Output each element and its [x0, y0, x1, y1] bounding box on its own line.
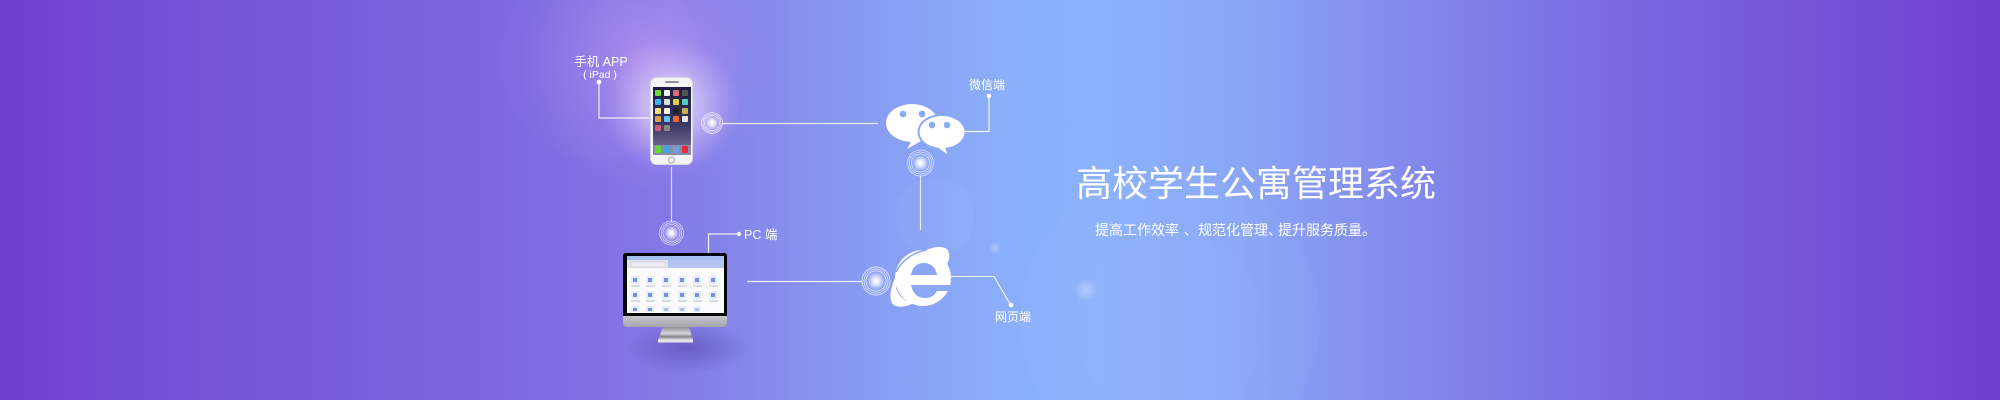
decorative bokeh circles	[500, 0, 1320, 400]
connector: monitor to IE	[747, 280, 862, 282]
label: web: 网页端	[995, 310, 1031, 324]
icon: internet explorer	[890, 247, 953, 307]
connector: wechat to IE	[920, 176, 922, 230]
label: phone app	[574, 55, 628, 81]
icon: desktop monitor	[623, 253, 750, 374]
label: phone app: 手机 APP	[574, 55, 628, 69]
connector: phone to monitor	[670, 167, 672, 222]
subtitle: 、	[1180, 222, 1198, 238]
connector: IE to label	[951, 276, 1013, 307]
connector: monitor to label	[708, 232, 741, 253]
label: wechat: 微信端	[969, 78, 1005, 92]
icon: phone glow	[604, 37, 740, 173]
label: phone app: ( iPad )	[583, 69, 617, 81]
ring: wechat bottom	[908, 150, 934, 176]
subtitle: 提升服务质量。	[1278, 222, 1376, 238]
ring: IE left	[862, 267, 890, 295]
ring: phone right	[702, 112, 722, 134]
icon grid: monitor screen	[631, 276, 718, 312]
icon: wechat	[886, 104, 966, 154]
subtitle: 规范化管理、	[1198, 222, 1282, 238]
icon: smartphone	[650, 78, 692, 164]
ring: phone bottom	[660, 221, 684, 245]
connector: phone to wechat	[722, 122, 878, 124]
connector: phone to label	[597, 80, 649, 118]
title: 高校学生公寓管理系统	[1076, 163, 1436, 204]
label: PC: PC 端	[744, 228, 777, 242]
subtitle: 提高工作效率	[1095, 222, 1179, 238]
connector: wechat to label	[964, 94, 991, 132]
